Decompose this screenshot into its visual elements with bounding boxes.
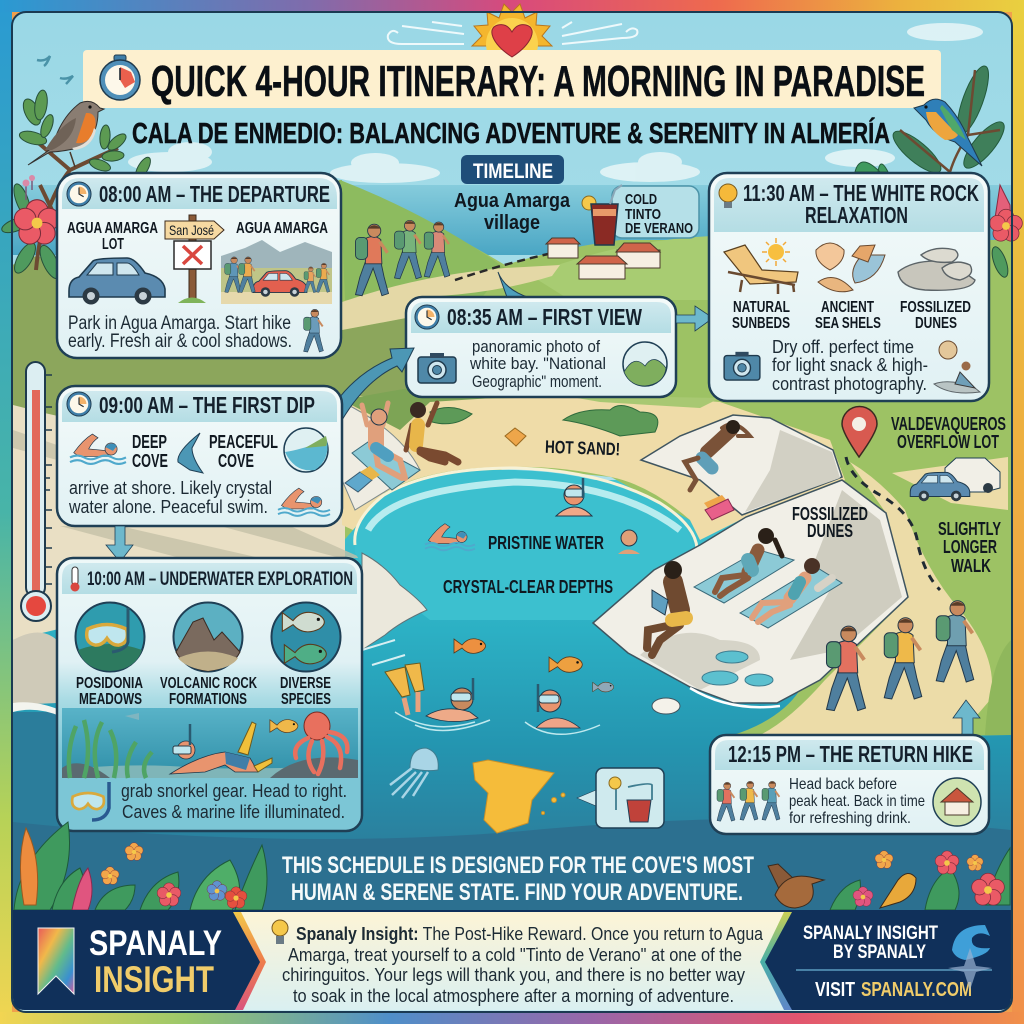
logo ribbon bbox=[38, 928, 74, 994]
arrow: first dip to first view bbox=[336, 348, 414, 420]
text block: Geographic" moment. bbox=[472, 372, 602, 391]
icon: swimmer small bbox=[278, 488, 330, 516]
text block: arrive at shore. Likely crystal bbox=[69, 478, 272, 498]
text block bbox=[68, 478, 272, 517]
logo text: INSIGHT bbox=[94, 959, 214, 1000]
labels: VOLCANIC ROCK bbox=[160, 675, 257, 692]
icon: clock bbox=[67, 392, 91, 416]
scene: underwater swimmers and fish bbox=[385, 639, 614, 734]
label: slightly longer walk: LONGER bbox=[943, 537, 997, 557]
path: dashed trail bbox=[846, 457, 940, 590]
heading: 08:00 AM – THE DEPARTURE bbox=[99, 181, 330, 207]
icon: san jose sign: San José bbox=[169, 222, 214, 238]
labels bbox=[732, 299, 971, 332]
timeline pill bbox=[461, 155, 564, 184]
labels: DEEP bbox=[132, 432, 167, 452]
text block bbox=[121, 781, 347, 822]
label: valdevaqueros overflow lot bbox=[891, 414, 1006, 452]
label: fossilized dunes: DUNES bbox=[807, 521, 853, 541]
title banner bbox=[83, 50, 941, 108]
label: slightly longer walk: WALK bbox=[951, 556, 991, 576]
text block bbox=[469, 337, 606, 391]
icon: diverse species bbox=[272, 602, 340, 672]
heading: 09:00 AM – THE FIRST DIP bbox=[99, 392, 315, 418]
text block: Dry off. perfect time bbox=[772, 337, 914, 357]
scene: sunbathers and reader on rock bbox=[647, 528, 842, 655]
text block: water alone. Peaceful swim. bbox=[68, 497, 268, 517]
labels: PEACEFUL bbox=[209, 432, 278, 452]
heading: RELAXATION bbox=[805, 202, 908, 228]
text block: Head back before bbox=[789, 776, 897, 793]
icon: stopwatch bbox=[100, 55, 140, 100]
icon: cove circle bbox=[284, 428, 328, 472]
scene: sunbathers top left of cove bbox=[345, 402, 526, 492]
labels: SPECIES bbox=[281, 691, 331, 708]
labels: COVE bbox=[132, 451, 168, 471]
labels: NATURAL bbox=[733, 299, 790, 316]
label: crystal-clear depths: CRYSTAL-CLEAR DEPTHS bbox=[443, 577, 613, 597]
wind lines bbox=[388, 22, 637, 44]
labels: POSIDONIA bbox=[76, 675, 143, 692]
closing message: HUMAN & SERENE STATE. FIND YOUR ADVENTURE. bbox=[291, 879, 743, 906]
thermometer bbox=[21, 362, 52, 621]
text block: panoramic photo of bbox=[472, 337, 600, 356]
callout: cold tinto de verano: TINTO bbox=[625, 206, 661, 223]
right foliage with birds bbox=[768, 848, 1010, 910]
illustration: three hikers on trail bbox=[356, 220, 548, 296]
icon: hikers bbox=[717, 781, 780, 821]
panel: 08:00 the departure bbox=[57, 173, 341, 358]
label: agua amarga: AGUA AMARGA bbox=[236, 220, 328, 237]
brand block bbox=[796, 923, 992, 1001]
callout: cold tinto de verano: COLD bbox=[625, 191, 657, 208]
arrow: return to hikers bbox=[953, 700, 980, 735]
labels bbox=[76, 675, 331, 708]
brand block: SPANALY.COM bbox=[861, 979, 972, 1001]
icon: san jose sign bbox=[165, 215, 224, 303]
label: hot sand: HOT SAND! bbox=[545, 437, 620, 459]
callout: cold tinto de verano: DE VERANO bbox=[625, 220, 693, 237]
insight ribbon edges bbox=[233, 912, 792, 1010]
label: slightly longer walk: SLIGHTLY bbox=[938, 519, 1001, 539]
icon: house circle bbox=[933, 778, 981, 826]
map: Spain bbox=[473, 760, 565, 833]
callout: drink bbox=[577, 768, 664, 828]
closing message: THIS SCHEDULE IS DESIGNED FOR THE COVE'S MOST bbox=[282, 852, 754, 879]
icon: blue car bbox=[69, 258, 165, 304]
heading: 10:00 AM – UNDERWATER EXPLORATION bbox=[87, 569, 353, 590]
text block: for refreshing drink. bbox=[789, 810, 911, 827]
panel: 12:15 the return hike bbox=[710, 735, 989, 834]
brand block: VISIT bbox=[815, 979, 855, 1001]
icon: wave logo bbox=[948, 925, 992, 990]
label: fossilized dunes: FOSSILIZED bbox=[792, 504, 868, 524]
brand block: SPANALY INSIGHT bbox=[803, 923, 938, 944]
insight text bbox=[282, 924, 764, 1006]
text block: peak heat. Back in time bbox=[789, 793, 925, 810]
label: Agua Amarga village: Agua Amarga bbox=[454, 190, 571, 212]
icon: ammonite and sunbather bbox=[934, 341, 980, 393]
label: slightly longer walk bbox=[938, 519, 1001, 576]
icon: hiker bbox=[304, 309, 323, 352]
icon: heart bbox=[492, 25, 532, 57]
icon: clock bbox=[67, 182, 91, 206]
arrow: first dip to underwater bbox=[106, 526, 133, 562]
panel: 11:30 the white rock relaxation bbox=[709, 173, 989, 401]
labels: SEA SHELS bbox=[815, 315, 881, 332]
label: Agua Amarga village: village bbox=[484, 212, 540, 234]
illustration: left robin on branch bbox=[18, 89, 153, 270]
text block: early. Fresh air & cool shadows. bbox=[68, 331, 292, 352]
scene: three returning hikers bbox=[826, 601, 974, 711]
footer bar bbox=[13, 910, 1011, 1010]
illustration: village houses bbox=[546, 238, 660, 279]
panel: 09:00 the first dip bbox=[57, 386, 342, 526]
arrow: first view to white rock bbox=[676, 306, 713, 331]
icon: volcanic rock bbox=[174, 602, 242, 672]
icon: shells bbox=[816, 243, 885, 292]
scene: snorkeler and swimmers in cove bbox=[425, 478, 640, 554]
callout: cold tinto de verano bbox=[582, 185, 699, 245]
labels: SUNBEDS bbox=[732, 315, 790, 332]
logo text: SPANALY bbox=[89, 924, 222, 963]
scene: sunbather on white rock bbox=[685, 420, 750, 520]
text block bbox=[68, 313, 292, 352]
text block bbox=[789, 776, 925, 827]
brand block: BY SPANALY bbox=[833, 942, 926, 963]
label: pristine water: PRISTINE WATER bbox=[488, 533, 604, 553]
illustration: birds in sky bbox=[37, 56, 73, 84]
insight text: Spanaly Insight: The Post-Hike Reward. Once you return to Agua bbox=[296, 924, 764, 944]
illustration: underwater scene bbox=[62, 708, 358, 778]
labels bbox=[132, 432, 278, 471]
icon: swimmer bbox=[70, 434, 126, 464]
text block: contrast photography. bbox=[772, 374, 927, 394]
icon: dolphin arrow bbox=[178, 433, 203, 473]
icon: sunbed bbox=[724, 238, 798, 294]
timeline pill: TIMELINE bbox=[473, 160, 553, 183]
icon: camera bbox=[724, 352, 760, 380]
labels: DUNES bbox=[915, 315, 957, 332]
insight text: to soak in the local atmosphere after a morning of adventure. bbox=[293, 986, 734, 1006]
logo text bbox=[89, 924, 222, 1000]
icon: posidonia meadows bbox=[76, 602, 144, 672]
icon: jellyfish bbox=[390, 748, 438, 798]
icon: landscape circle bbox=[623, 342, 667, 386]
text block: Caves & marine life illuminated. bbox=[122, 802, 345, 822]
icon: camera bbox=[418, 353, 456, 383]
labels: ANCIENT bbox=[821, 299, 874, 316]
text block: white bay. "National bbox=[469, 354, 606, 373]
label: lot bbox=[67, 220, 158, 253]
icon: sun with heart bbox=[472, 4, 552, 70]
icon: clock bbox=[415, 305, 439, 329]
icon: bulb bbox=[272, 920, 288, 944]
text block bbox=[772, 337, 928, 394]
labels: COVE bbox=[218, 451, 254, 471]
labels: FOSSILIZED bbox=[900, 299, 971, 316]
panel: 08:35 first view bbox=[406, 272, 676, 397]
labels: FORMATIONS bbox=[169, 691, 247, 708]
left foliage bbox=[14, 822, 267, 910]
text block: grab snorkel gear. Head to right. bbox=[121, 781, 347, 801]
label: Agua Amarga village bbox=[454, 190, 571, 234]
icon: fossil rock bbox=[898, 248, 975, 290]
text block: for light snack & high- bbox=[772, 355, 928, 375]
illustration: parked car and hikers bbox=[221, 240, 332, 304]
label: lot: LOT bbox=[102, 236, 124, 253]
icon: parked cars bbox=[910, 458, 1000, 501]
illustration: right red flower bbox=[989, 185, 1022, 279]
icon: map pin bbox=[842, 406, 877, 457]
icon: thermometer bbox=[70, 567, 80, 592]
label: fossilized dunes bbox=[792, 504, 868, 541]
insight box bbox=[241, 912, 784, 1010]
insight text: Amarga, treat yourself to a cold "Tinto de Verano" at one of the bbox=[288, 945, 742, 965]
labels: MEADOWS bbox=[79, 691, 142, 708]
insight text: chiringuitos. Your legs will thank you, and there is no better way bbox=[282, 965, 745, 985]
heading bbox=[743, 180, 979, 228]
closing message bbox=[282, 852, 754, 906]
illustration: right bluebird with pine bbox=[855, 63, 1010, 179]
icon: snorkel bbox=[72, 782, 109, 820]
panel: 10:00 underwater exploration bbox=[57, 558, 362, 831]
text block: Park in Agua Amarga. Start hike bbox=[68, 313, 291, 334]
illustration: left hibiscus flower bbox=[0, 175, 64, 281]
labels: DIVERSE bbox=[280, 675, 331, 692]
label: lot: AGUA AMARGA bbox=[67, 220, 158, 237]
heading: 08:35 AM – FIRST VIEW bbox=[447, 304, 642, 330]
icon: bulb bbox=[719, 184, 737, 208]
